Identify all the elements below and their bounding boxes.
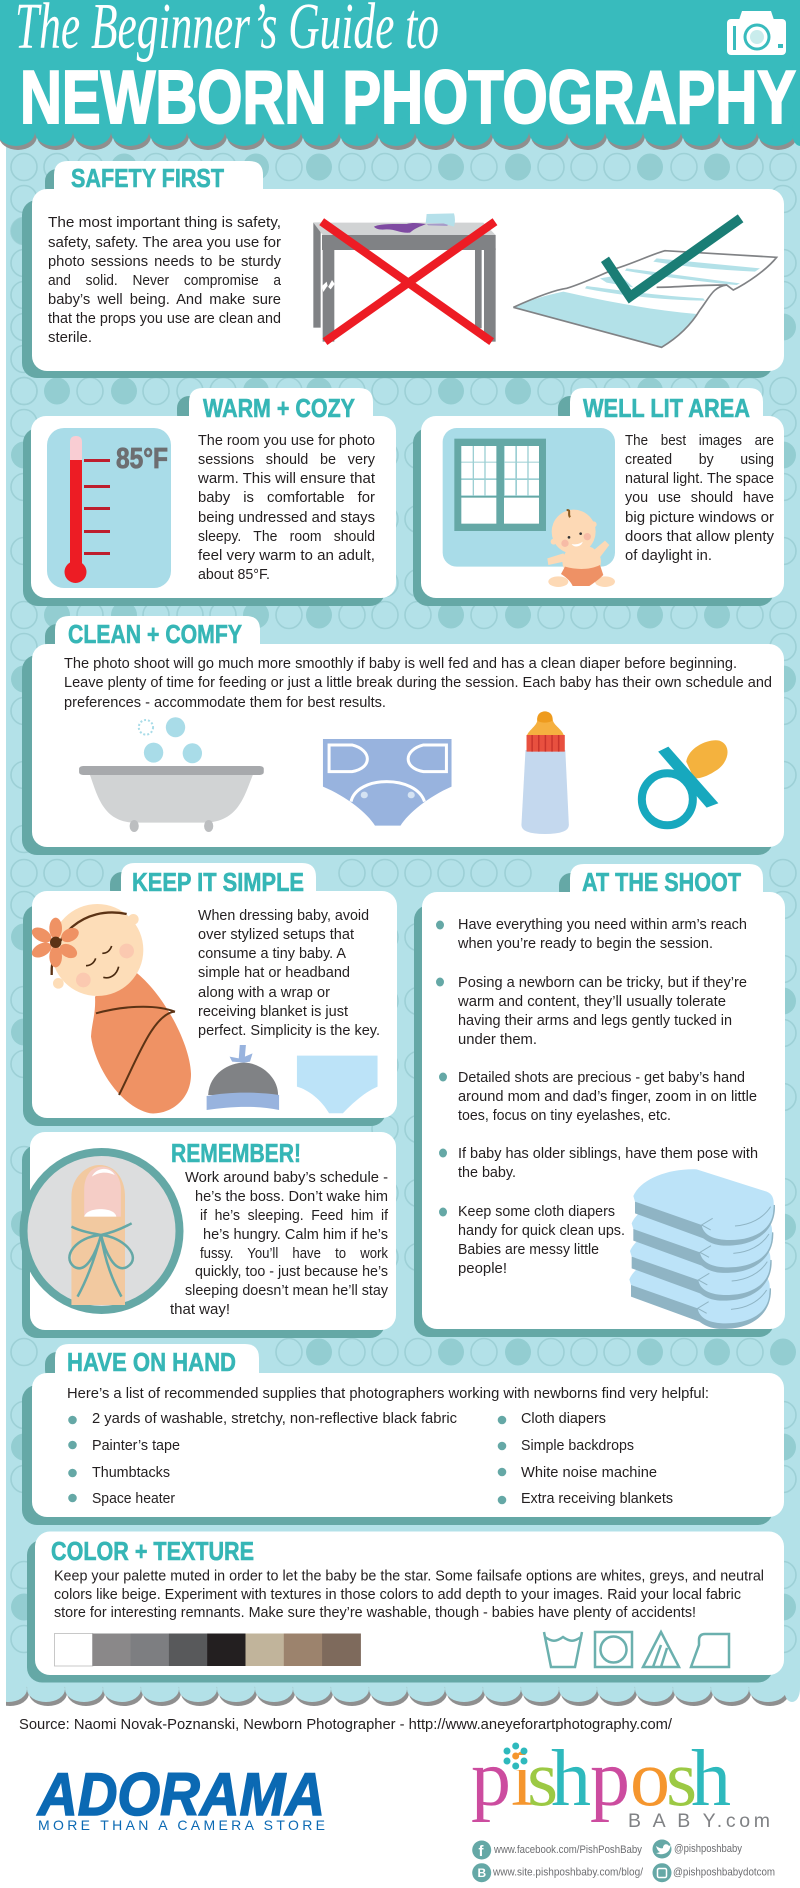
- social links: B: [478, 1866, 486, 1880]
- body text: that way!: [170, 1301, 230, 1318]
- supplies list: 2 yards of washable, stretchy, non-reflective black fabric: [92, 1410, 457, 1427]
- panel: color + texture: [27, 1532, 784, 1682]
- body text: doors that allow plenty: [625, 528, 774, 545]
- panel: remember: [22, 1132, 396, 1338]
- body text: preferences - accommodate them for best results.: [64, 694, 386, 711]
- body text: The room you use for photo: [198, 432, 375, 449]
- source credit: Source: Naomi Novak-Poznanski, Newborn Photographer - http://www.aneyeforartphotography.com/: [19, 1716, 673, 1733]
- body text: photo sessions needs to be sturdy: [48, 253, 281, 270]
- color swatches: [54, 1634, 361, 1666]
- heading: REMEMBER!: [171, 1138, 301, 1168]
- bullet list: when you’re ready to begin the session.: [457, 935, 713, 952]
- body text: natural light. The space: [625, 470, 774, 487]
- body text: that the props you use are clean and: [48, 310, 281, 327]
- body text: perfect. Simplicity is the key.: [198, 1022, 380, 1039]
- social links: @pishposhbaby: [674, 1843, 742, 1855]
- body text: [64, 655, 772, 711]
- icon: baby hat: [207, 1045, 279, 1110]
- icon: finger with ribbon: [24, 1152, 180, 1310]
- body text: if he’s sleeping. Feed him if: [200, 1207, 389, 1224]
- icon: flower: [504, 1742, 528, 1770]
- body text: sleeping doesn’t mean he’ll stay: [185, 1282, 388, 1299]
- social links: www.facebook.com/PishPoshBaby: [493, 1844, 642, 1856]
- bullet list: having their arms and legs gently tucked in: [458, 1012, 732, 1029]
- social links: www.site.pishposhbaby.com/blog/: [492, 1867, 644, 1879]
- panel: at the shoot: [414, 864, 785, 1337]
- bullet list: warm and content, they’ll usually tolerate: [457, 993, 726, 1010]
- supplies list: White noise machine: [521, 1464, 657, 1481]
- body text: he’s hungry. Calm him if he’s: [203, 1226, 388, 1243]
- heading: HAVE ON HAND: [67, 1347, 236, 1377]
- social links: [472, 1840, 775, 1882]
- body text: Leave plenty of time for feeding or just a little break during the session. Each baby has their own schedule and: [64, 674, 772, 691]
- heading: SAFETY FIRST: [71, 163, 224, 193]
- supplies list: Simple backdrops: [521, 1437, 634, 1454]
- icon: stack of cloth diapers: [629, 1169, 775, 1329]
- icon: clean blanket with check: [513, 218, 777, 347]
- body text: sleepy. The room should: [198, 528, 375, 545]
- body text: simple hat or headband: [198, 964, 350, 981]
- body text: The photo shoot will go much more smoothly if baby is well fed and has a clean diaper before beginning.: [64, 655, 737, 672]
- icon: diaper: [323, 739, 452, 826]
- body text: fussy. You’ll have to work: [200, 1245, 388, 1262]
- icon: unsafe table: [313, 213, 496, 342]
- intro text: Here’s a list of recommended supplies that photographers working with newborns find very helpful:: [67, 1385, 709, 1402]
- body text: big picture windows or: [625, 509, 774, 526]
- supplies list: [68, 1410, 673, 1507]
- body text: consume a tiny baby. A: [198, 945, 346, 962]
- logo: adorama: MORE THAN A CAMERA STORE: [38, 1817, 325, 1833]
- body text: [48, 214, 282, 346]
- body text: [197, 432, 376, 583]
- icons: fabric care symbols: [544, 1632, 729, 1667]
- heading: KEEP IT SIMPLE: [132, 867, 304, 897]
- body text: safety, safety. The area you use for: [48, 234, 281, 251]
- bullet list: the baby.: [458, 1164, 516, 1181]
- logo: pishposh baby: B A B Y.com: [628, 1810, 770, 1832]
- supplies list: Extra receiving blankets: [521, 1490, 673, 1507]
- heading: CLEAN + COMFY: [68, 619, 242, 649]
- body text: of daylight in.: [625, 547, 712, 564]
- panel: well lit area: [413, 388, 784, 606]
- bullet list: toes, focus on tiny eyelashes, etc.: [458, 1107, 671, 1124]
- logo: pishposh baby: pishposh: [471, 1735, 731, 1823]
- icon: camera: [727, 11, 786, 55]
- bullet list: Babies are messy little: [458, 1241, 599, 1258]
- body text: Work around baby’s schedule -: [185, 1169, 388, 1186]
- icon: baby pants: [297, 1056, 378, 1113]
- body text: The best images are: [625, 432, 774, 449]
- body text: baby’s well being. And make sure: [48, 291, 281, 308]
- body text: along with a wrap or: [198, 984, 330, 1001]
- body text: store for interesting remnants. Make sure they’re washable, though - babies have plenty of accidents!: [54, 1604, 696, 1621]
- body text: [170, 1169, 389, 1318]
- supplies list: Space heater: [92, 1490, 175, 1507]
- bullet list: Keep some cloth diapers: [458, 1203, 615, 1220]
- icon: window and baby: [443, 428, 615, 587]
- panel: safety first: [22, 161, 784, 378]
- social links: @pishposhbabydotcom: [673, 1867, 775, 1879]
- panel: warm + cozy: [23, 388, 396, 606]
- body text: When dressing baby, avoid: [198, 907, 369, 924]
- heading: WARM + COZY: [203, 393, 355, 423]
- icon: thermometer: 85°F: [116, 443, 168, 475]
- bullet list: under them.: [458, 1031, 537, 1048]
- bullet list: If baby has older siblings, have them pose with: [458, 1145, 758, 1162]
- body text: created by using: [625, 451, 774, 468]
- panel: clean + comfy: [22, 616, 784, 855]
- panel: have on hand: [22, 1344, 784, 1525]
- bullet list: Posing a newborn can be tricky, but if they’re: [458, 974, 747, 991]
- bullet list: [436, 916, 758, 1277]
- panel: keep it simple: [23, 863, 397, 1126]
- body text: baby is comfortable for: [198, 489, 375, 506]
- body text: warm. This will ensure that: [197, 470, 376, 487]
- header banner: [0, 0, 800, 150]
- bullet list: handy for quick clean ups.: [458, 1222, 625, 1239]
- icon: swaddled baby: [29, 904, 191, 1113]
- body text: over stylized setups that: [198, 926, 355, 943]
- bullet list: Have everything you need within arm’s reach: [458, 916, 747, 933]
- body text: receiving blanket is just: [198, 1003, 349, 1020]
- body text: [198, 907, 380, 1039]
- icon: bathtub: [79, 717, 264, 832]
- heading: COLOR + TEXTURE: [51, 1536, 254, 1566]
- icon: baby bottle: [521, 711, 569, 834]
- body text: and solid. Never compromise a: [48, 272, 282, 289]
- heading: WELL LIT AREA: [583, 393, 750, 423]
- body text: [54, 1568, 764, 1621]
- icon: pacifier: [642, 740, 728, 825]
- body text: sterile.: [48, 329, 92, 346]
- heading: AT THE SHOOT: [582, 867, 741, 897]
- logo: adorama: ADORAMA: [36, 1761, 325, 1828]
- supplies list: Painter’s tape: [92, 1437, 180, 1454]
- supplies list: Cloth diapers: [521, 1410, 606, 1427]
- body text: you use should have: [625, 489, 774, 506]
- body text: sessions should be very: [198, 451, 375, 468]
- social links: f: [478, 1843, 484, 1860]
- body text: Keep your palette muted in order to let the baby be the star. Some failsafe options are whites, greys, and neutral: [54, 1568, 764, 1584]
- bullet list: around mom and dad’s finger, zoom in on little: [458, 1088, 757, 1105]
- bullet list: Detailed shots are precious - get baby’s hand: [458, 1069, 745, 1086]
- supplies list: Thumbtacks: [92, 1464, 170, 1481]
- bullet list: people!: [458, 1260, 507, 1277]
- body text: The most important thing is safety,: [48, 214, 281, 231]
- body text: [625, 432, 774, 564]
- body text: he’s the boss. Don’t wake him: [195, 1188, 388, 1205]
- body text: quickly, too - just because he’s: [195, 1263, 388, 1280]
- body text: feel very warm to an adult,: [198, 547, 375, 564]
- body text: being undressed and stays: [198, 509, 375, 526]
- body text: colors like beige. Experiment with textures in those colors to add depth to your images. Raid your local fabric: [54, 1586, 741, 1603]
- body text: about 85°F.: [198, 566, 270, 583]
- icon: thermometer: [47, 428, 171, 588]
